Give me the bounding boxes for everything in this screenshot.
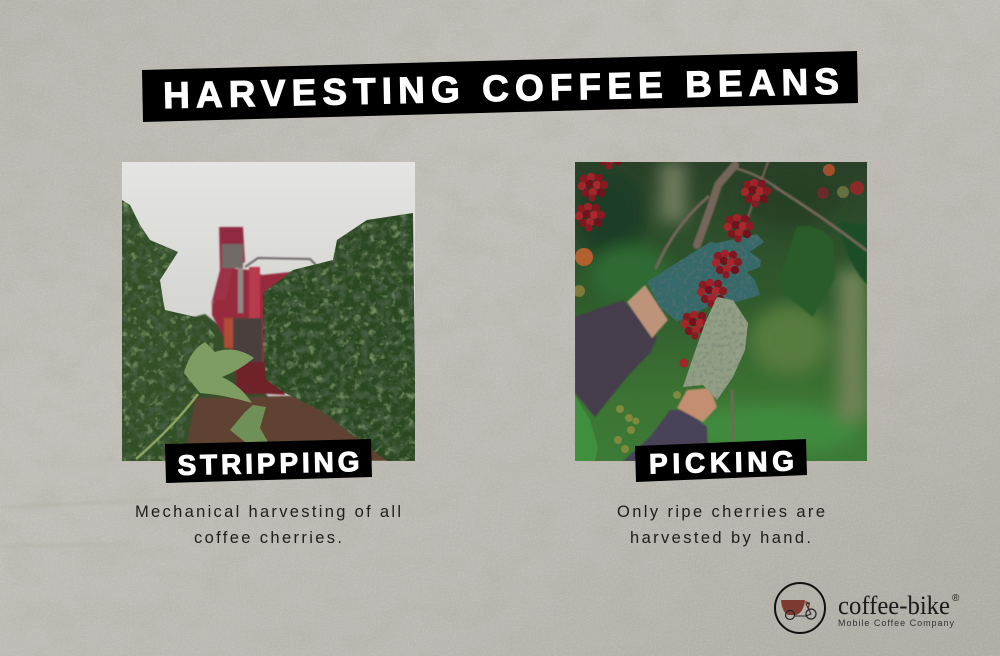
logo wordmark: coffee-bike xyxy=(838,591,950,620)
text: picking description: harvested by hand. xyxy=(630,529,811,547)
text: stripping description: Mechanical harvesting of all xyxy=(135,503,401,521)
icon: cup on a cargo bike xyxy=(775,583,825,633)
teal glove xyxy=(647,234,764,322)
foreground leaf xyxy=(575,395,598,461)
registered mark: ® xyxy=(952,593,960,604)
branches xyxy=(656,162,866,440)
text: stripping description xyxy=(135,503,401,547)
sleeve and arms xyxy=(575,285,717,461)
large background leaf xyxy=(786,226,835,317)
panel: stripping xyxy=(122,162,416,547)
label: stripping: STRIPPING xyxy=(177,446,360,481)
photo: mechanical harvester between coffee hedges xyxy=(122,162,416,461)
text: picking description xyxy=(617,503,825,547)
right dark leaf xyxy=(838,222,867,285)
logo tagline: Mobile Coffee Company xyxy=(838,618,954,628)
cherry clusters xyxy=(573,141,864,368)
title banner: HARVESTING COFFEE BEANS xyxy=(163,61,839,116)
panel: picking xyxy=(573,141,867,547)
photo: gloved hands picking ripe cherries xyxy=(573,141,867,461)
label: picking: PICKING xyxy=(649,445,794,480)
text: picking description: Only ripe cherries are xyxy=(617,503,825,521)
grey-green glove xyxy=(683,297,748,400)
leaf in the foreground xyxy=(136,342,268,459)
text: stripping description: coffee cherries. xyxy=(194,529,342,547)
green unripe cherries xyxy=(614,391,681,453)
label: picking xyxy=(635,439,807,482)
label: stripping xyxy=(165,439,372,483)
logo: coffee-bike xyxy=(775,583,960,633)
